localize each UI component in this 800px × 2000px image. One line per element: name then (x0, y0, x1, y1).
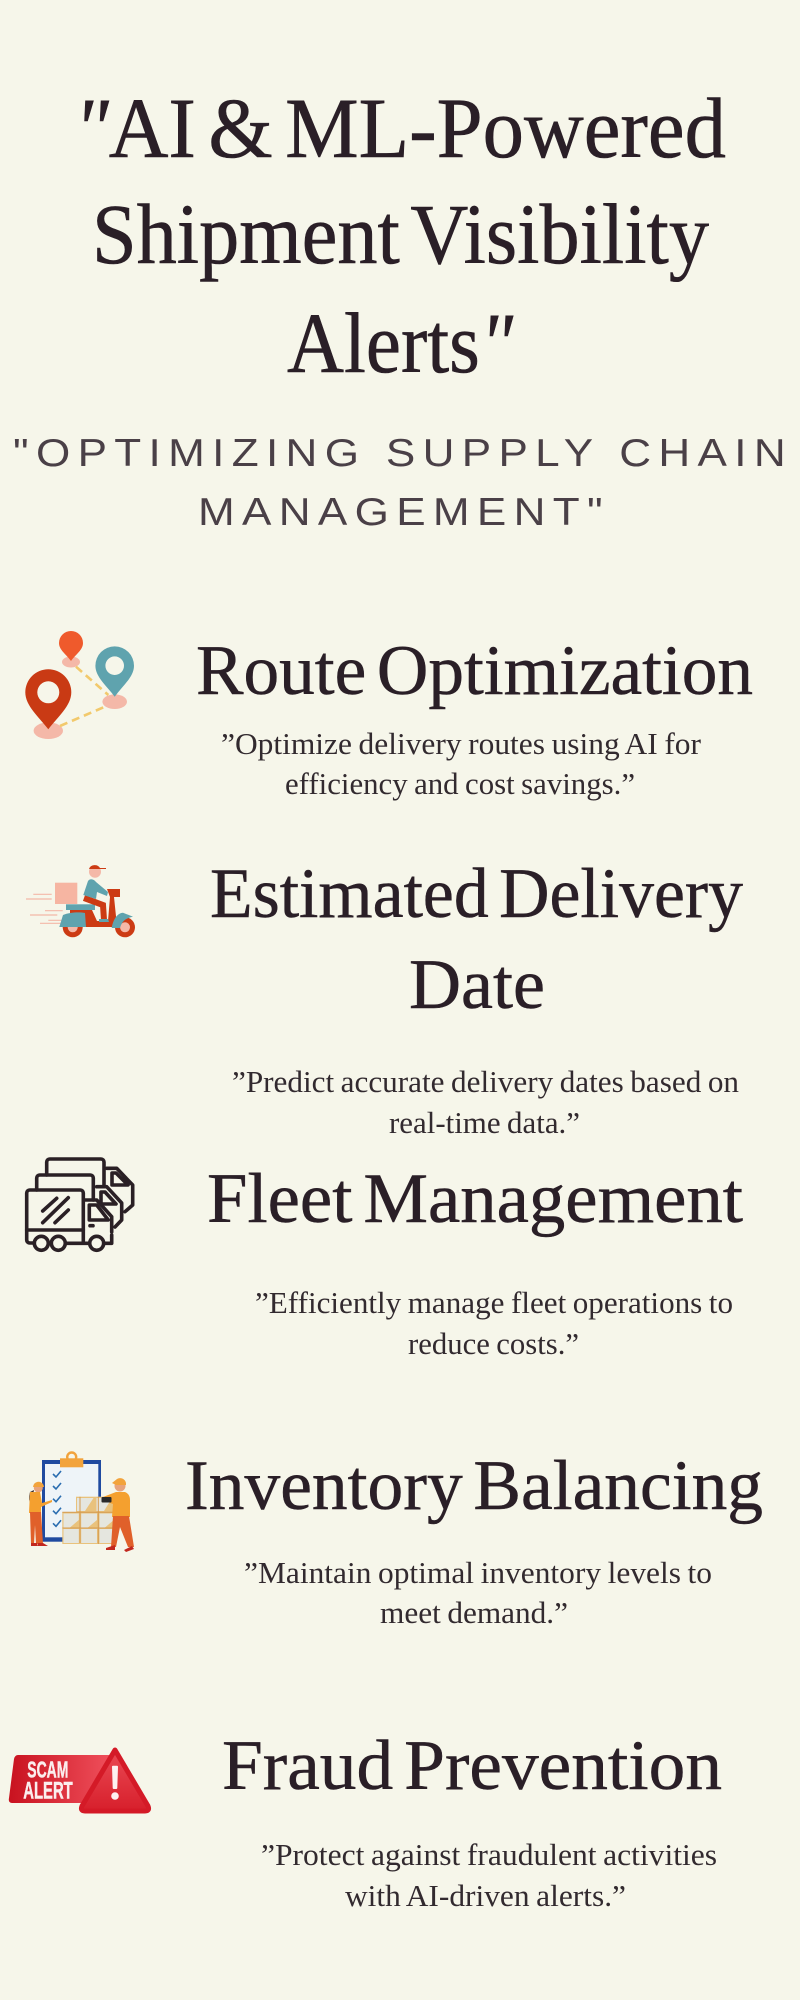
text: route optimization description: ”Optimize delivery routes using AI for (221, 726, 702, 761)
title: "AI & ML-Powered (74, 80, 726, 176)
title (74, 80, 726, 391)
text: fraud prevention description (261, 1837, 717, 1913)
heading: fleet management: Fleet Management (207, 1160, 743, 1238)
heading: estimated delivery date: Date (409, 946, 545, 1024)
heading: fraud prevention: Fraud Prevention (222, 1727, 722, 1805)
text: inventory balancing description: meet demand.” (380, 1595, 568, 1630)
text: fraud prevention description: with AI-driven alerts.” (345, 1878, 626, 1913)
text: inventory balancing description: ”Maintain optimal inventory levels to (244, 1555, 712, 1590)
subtitle: "OPTIMIZING SUPPLY CHAIN (13, 432, 793, 475)
icon: scam alert badge (9, 1750, 149, 1811)
text: estimated delivery description (232, 1064, 739, 1140)
heading: estimated delivery date: Estimated Delivery (210, 855, 743, 933)
text: route optimization description (221, 726, 702, 801)
subtitle (13, 432, 793, 534)
subtitle: MANAGEMENT" (198, 491, 610, 534)
text: fleet management description: ”Efficiently manage fleet operations to (255, 1285, 733, 1320)
heading: inventory balancing: Inventory Balancing (185, 1447, 763, 1525)
text: estimated delivery description: ”Predict accurate delivery dates based on (232, 1064, 739, 1099)
text: estimated delivery description: real-time data.” (389, 1105, 580, 1140)
heading: estimated delivery date (210, 855, 743, 1024)
icon: scam alert badge: SCAM (27, 1756, 68, 1782)
text: fraud prevention description: ”Protect against fraudulent activities (261, 1837, 717, 1872)
text: fleet management description: reduce costs.” (408, 1326, 579, 1361)
text: fleet management description (255, 1285, 733, 1361)
icon: inventory clipboard with workers (29, 1452, 134, 1552)
icon: fleet of trucks (27, 1159, 133, 1250)
icon: route map pins (25, 631, 134, 739)
heading: route optimization: Route Optimization (196, 632, 753, 710)
icon: scam alert badge: ALERT (23, 1777, 73, 1804)
text: inventory balancing description (244, 1555, 712, 1630)
title: Alerts" (287, 295, 514, 391)
icon: delivery scooter (26, 865, 135, 937)
text: route optimization description: efficiency and cost savings.” (285, 766, 635, 801)
title: Shipment Visibility (92, 186, 709, 282)
